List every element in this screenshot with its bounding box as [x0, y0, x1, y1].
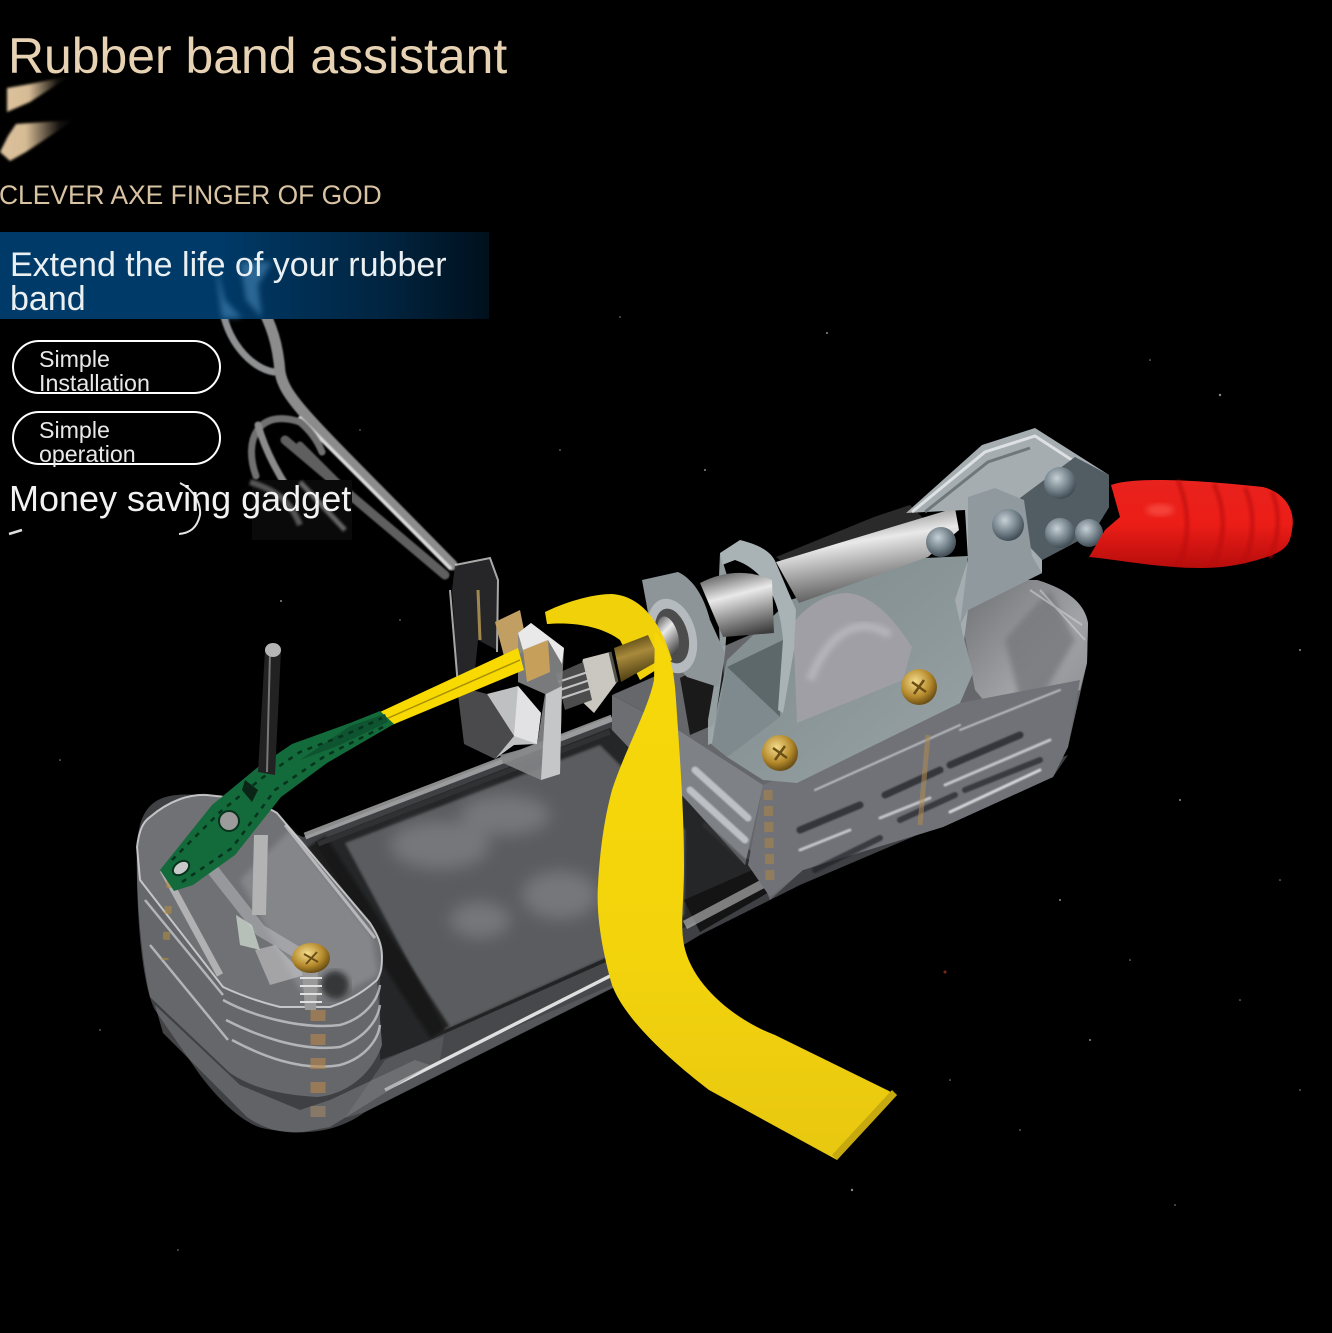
pill: simple installation — [12, 340, 221, 394]
pill: simple operation: Simple — [39, 417, 110, 443]
yellow band back loop — [545, 594, 672, 680]
pill: simple installation: Installation — [39, 370, 150, 396]
red handle grip — [1089, 480, 1293, 568]
clamp back plate — [710, 556, 973, 783]
block left face — [678, 730, 763, 865]
pocket side walls — [137, 847, 382, 1097]
rod rivet — [926, 527, 956, 557]
pill: simple operation — [12, 411, 221, 465]
icon: curved arc mark — [179, 483, 200, 534]
subtitle: CLEVER AXE FINGER OF GOD — [0, 180, 382, 210]
banner heading: Extend the life of your rubber band — [10, 246, 447, 318]
patch behind lower heading — [250, 480, 352, 540]
cylinder rod — [776, 508, 959, 603]
bolt head — [457, 686, 514, 759]
plate window — [793, 593, 912, 723]
threaded rod and nuts — [457, 635, 660, 759]
arm dark face — [1020, 457, 1109, 560]
right acrylic block — [612, 580, 1088, 900]
surgical clamp scissors — [222, 300, 452, 575]
acrylic holder tabs — [450, 558, 564, 780]
block front face — [748, 680, 1080, 897]
acrylic base plate — [137, 717, 1068, 1132]
block top surface — [962, 580, 1088, 720]
green felt strip — [160, 711, 394, 891]
heading: money saving gadget: Money saving gadget — [9, 478, 351, 519]
plate front rim highlight — [345, 958, 615, 1118]
bolt nut — [487, 686, 541, 759]
elastic strands — [380, 648, 524, 725]
left acrylic pocket — [137, 795, 430, 1132]
silver pin lower — [252, 835, 268, 915]
clamp rivets — [1044, 467, 1076, 499]
silver pin upper — [258, 643, 281, 775]
toggle clamp — [639, 428, 1293, 783]
glass floor — [315, 728, 770, 1060]
title: Rubber band assistant — [8, 28, 507, 84]
pill: simple installation: Simple — [39, 346, 110, 372]
icon: tan brush strokes — [0, 76, 74, 161]
starfield background specks — [59, 316, 1301, 1251]
spindle cylinder — [700, 573, 774, 637]
banner: blue gradient band — [0, 232, 489, 319]
icon: small tick mark — [9, 530, 22, 534]
clamp screws — [901, 669, 937, 705]
flange bracket — [720, 540, 796, 713]
bracket dark face — [727, 640, 783, 717]
spindle washer — [642, 572, 725, 687]
rear dark slot — [776, 505, 925, 575]
main arm plates — [906, 428, 1109, 640]
screw with spring — [292, 943, 349, 1010]
pill: simple operation: operation — [39, 441, 136, 467]
yellow band front strip — [598, 632, 897, 1160]
pocket top surface — [137, 795, 382, 1007]
